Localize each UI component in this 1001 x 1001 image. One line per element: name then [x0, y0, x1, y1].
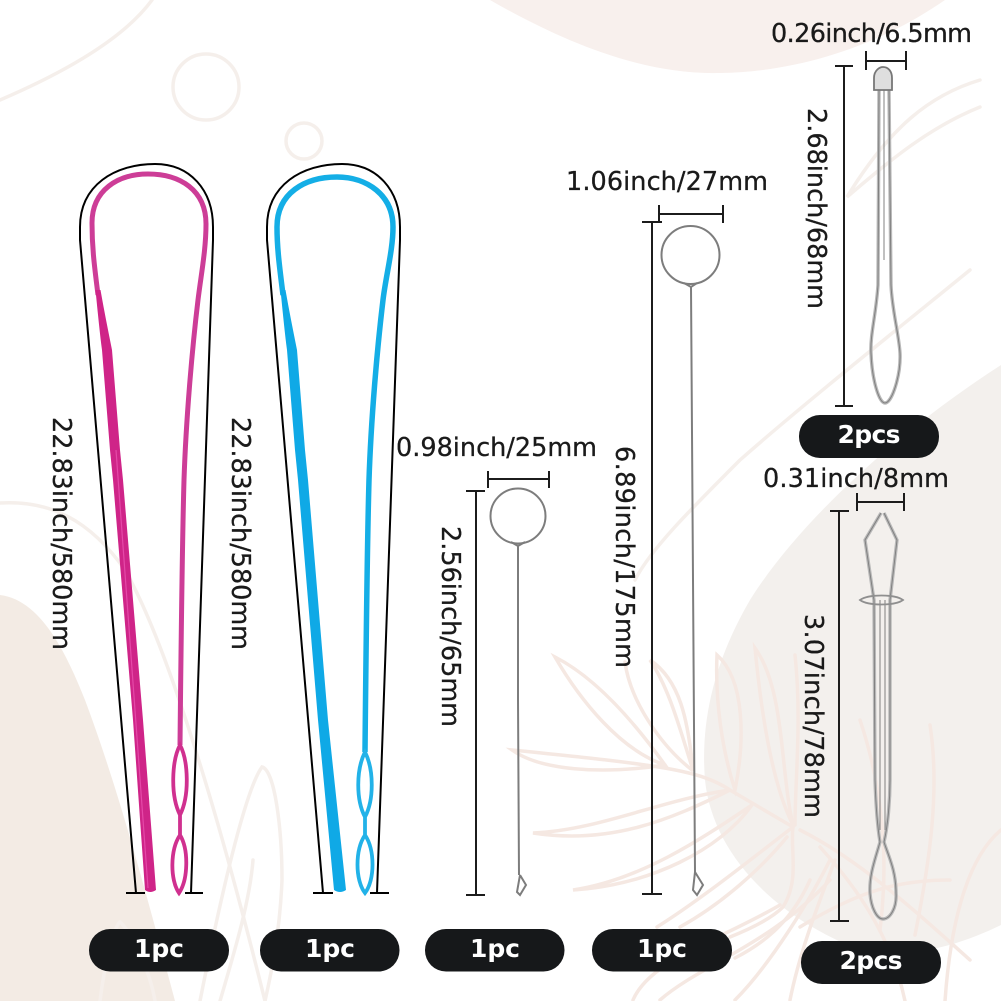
- small ring needle: [466, 471, 549, 895]
- dimension: small ring height: [466, 491, 485, 895]
- quantity pill 4: [592, 929, 732, 972]
- pink thick strand: [96, 290, 156, 892]
- beige blob left: [0, 595, 175, 1001]
- pink needle eyes: [172, 745, 187, 893]
- long needle wire: [662, 226, 720, 895]
- label: bodkin width: 0.26inch/6.5mm: [771, 19, 972, 49]
- clip wires: [865, 513, 897, 919]
- quantity pill 5: 2pcs: [838, 420, 900, 449]
- label: pink length right: 22.83inch/580mm: [225, 417, 255, 650]
- quantity pill 6: 2pcs: [840, 946, 902, 975]
- blue needle eyes: [358, 752, 372, 893]
- label: small ring height: 2.56inch/65mm: [435, 526, 465, 727]
- label: pink length left: 22.83inch/580mm: [46, 417, 76, 650]
- grey blob bottom right: [704, 365, 1001, 953]
- label: long ring width: 1.06inch/27mm: [566, 167, 768, 197]
- quantity pill 6: [801, 941, 941, 984]
- label: long ring height: 6.89inch/175mm: [609, 446, 639, 668]
- bottom right bodkin: [830, 493, 904, 921]
- long ring needle: [642, 205, 723, 895]
- quantity pill 1: [89, 929, 229, 972]
- outline: blue threader: [267, 164, 400, 893]
- blue loop wire: [277, 177, 393, 752]
- label: clip width: 0.31inch/8mm: [763, 464, 949, 494]
- label: small ring width: 0.98inch/25mm: [396, 433, 597, 463]
- quantity pill 3: [425, 929, 564, 972]
- pink loop wire: [92, 174, 206, 745]
- dimension: clip width: [857, 493, 904, 511]
- dimension: long ring height: [642, 222, 662, 894]
- label: bodkin height: 2.68inch/68mm: [801, 108, 831, 309]
- quantity pill 5: [799, 415, 939, 458]
- dimension: small ring width: [488, 471, 549, 488]
- dimension: bodkin height: [835, 66, 853, 406]
- bodkin head: [874, 67, 892, 90]
- label: clip height: 3.07inch/78mm: [798, 614, 828, 818]
- dimension: long ring width: [659, 205, 723, 223]
- quantity pill 4: 1pc: [637, 934, 687, 963]
- quantity pill 3: 1pc: [470, 934, 520, 963]
- bodkin wires: [871, 90, 900, 403]
- blue thick strand: [280, 290, 346, 892]
- blue threader: [267, 164, 400, 893]
- quantity pill 1: 1pc: [134, 934, 184, 963]
- quantity pill 2: [260, 929, 400, 972]
- ring needle wire: [490, 488, 546, 895]
- pink leaf branch: [512, 648, 1001, 1001]
- pink threader: [80, 164, 213, 893]
- clip band: [860, 596, 903, 604]
- pink blob top right: [490, 0, 945, 73]
- top right bodkin: [835, 51, 906, 406]
- dimension: bodkin width: [866, 51, 906, 70]
- dimension: clip height: [830, 511, 849, 921]
- outline: pink threader: [80, 164, 213, 893]
- quantity pill 2: 1pc: [305, 934, 355, 963]
